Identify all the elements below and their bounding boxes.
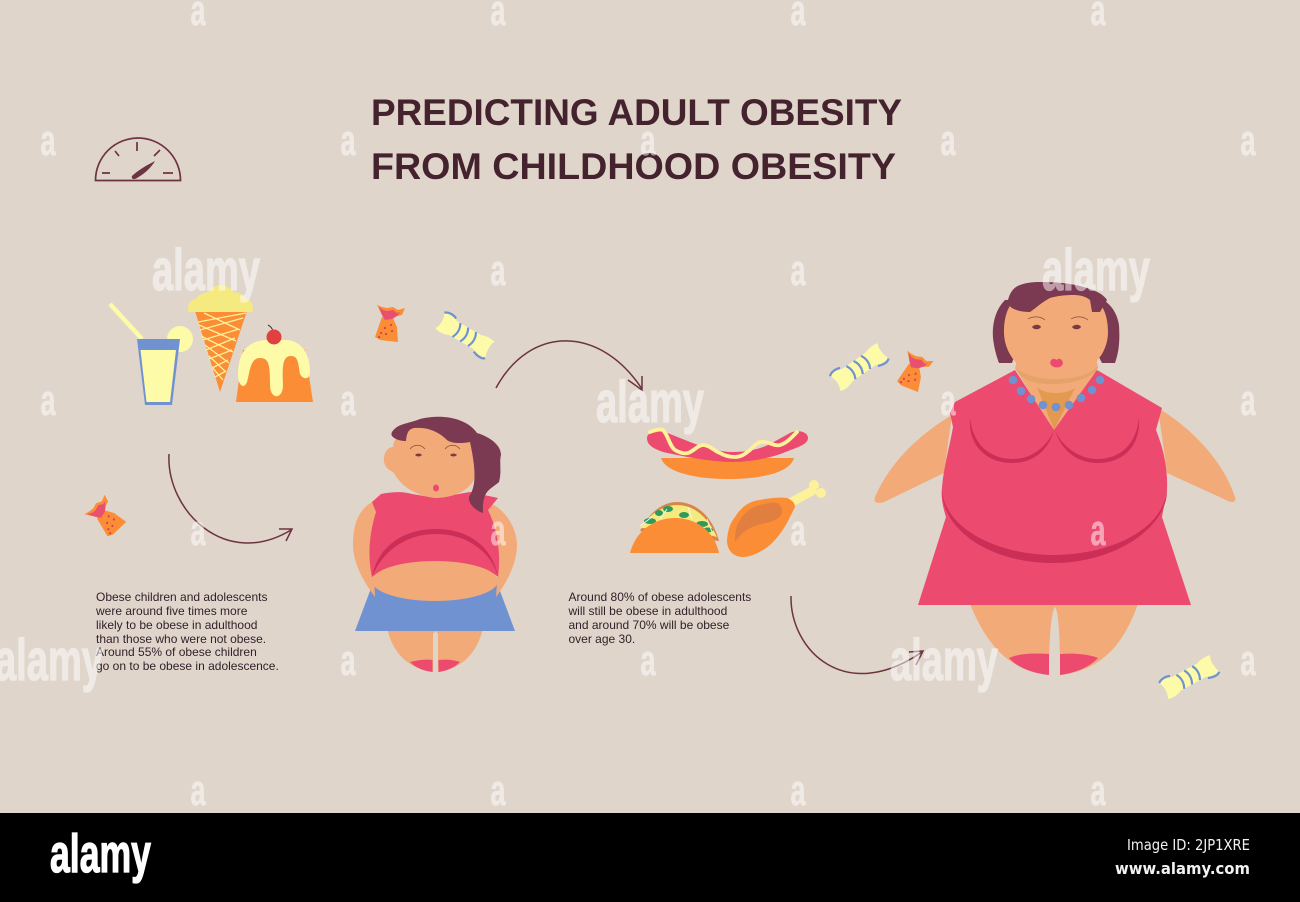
- footer logo: alamy: [50, 824, 151, 884]
- arrow: from sweets to girl: [169, 454, 292, 543]
- text block: children statistics: go on to be obese in adolescence.: [96, 659, 279, 673]
- watermark: small letter grid: a: [790, 246, 806, 295]
- text block: children statistics: than those who were not obese.: [96, 632, 266, 646]
- icon: hot dog: [647, 430, 808, 479]
- woman belly crease: [942, 490, 1167, 563]
- girl shirt: [369, 492, 499, 577]
- icon: pudding with cherry: [236, 325, 313, 402]
- woman hair back: [993, 298, 1119, 363]
- text block: adolescents statistics: will still be obese in adulthood: [568, 604, 727, 618]
- figure: obese girl: [353, 417, 517, 672]
- text block: adolescents statistics: and around 70% will be obese: [568, 618, 730, 632]
- watermark: small letter grid: a: [40, 376, 56, 425]
- woman neck and chest: [1015, 350, 1098, 432]
- watermark: small letter grid: a: [640, 636, 656, 685]
- woman dress: [918, 370, 1191, 605]
- watermark: small letter grid: a: [640, 116, 656, 165]
- text block: children statistics: likely to be obese in adulthood: [96, 618, 257, 632]
- girl legs: [387, 628, 483, 672]
- arrow: from girl to fast food: [496, 341, 642, 390]
- icon: taco: [630, 502, 719, 553]
- girl belly: [372, 561, 498, 601]
- girl face details: [410, 445, 460, 492]
- watermark: alamy repeated text: alamy: [596, 370, 704, 435]
- girl skirt: [355, 583, 515, 631]
- title: [371, 92, 902, 187]
- girl hair: [391, 417, 501, 513]
- text block: children statistics: were around five times more: [95, 604, 248, 618]
- watermark: small letter grid: a: [340, 116, 356, 165]
- text block: children statistics: Obese children and adolescents: [96, 590, 267, 604]
- icon: striped candy: [434, 311, 496, 360]
- watermark: small letter grid: a: [790, 506, 806, 555]
- icon: wrapped candy near woman: [896, 350, 934, 394]
- watermark: small letter grid: a: [340, 636, 356, 685]
- watermark: small letter grid: a: [790, 766, 806, 815]
- girl socks: [410, 660, 460, 672]
- icon: wrapped candy orange: [375, 305, 405, 342]
- icon: striped candy lower right: [1158, 653, 1220, 701]
- icon: chicken drumstick: [727, 480, 826, 557]
- girl head: [384, 426, 478, 498]
- icon: striped candy near woman: [829, 341, 890, 393]
- figure: obese adult woman: [875, 282, 1235, 675]
- woman necklace: [1009, 376, 1104, 411]
- girl arms: [353, 500, 517, 597]
- woman chest creases: [970, 418, 1139, 463]
- watermark: small letter grid: a: [340, 376, 356, 425]
- icon: drink glass with straw and lemon: [110, 304, 193, 405]
- woman arms: [875, 408, 1235, 503]
- watermark: small letter grid: a: [1090, 506, 1106, 555]
- watermark: small letter grid: a: [1240, 116, 1256, 165]
- text block: adolescents statistics: [568, 590, 751, 646]
- watermark: small letter grid: a: [1240, 376, 1256, 425]
- woman face details: [1028, 317, 1088, 368]
- watermark: small letter grid: a: [940, 116, 956, 165]
- watermark: small letter grid: a: [940, 376, 956, 425]
- text block: children statistics: Around 55% of obese children: [96, 645, 257, 659]
- footer image id: Image ID: 2JP1XRE: [1127, 836, 1250, 854]
- woman head: [1004, 294, 1108, 378]
- title: PREDICTING ADULT OBESITY: [371, 92, 902, 133]
- watermark: alamy repeated text: [0, 238, 1150, 693]
- icon: ice cream cone: [188, 285, 253, 392]
- woman socks: [1009, 653, 1098, 675]
- woman hair top: [1008, 282, 1107, 312]
- watermark: small letter grid: a: [190, 506, 206, 555]
- text block: adolescents statistics: over age 30.: [568, 632, 635, 646]
- footer bar: [0, 813, 1300, 902]
- icon: wrapped candy left: [83, 493, 131, 540]
- watermark: alamy repeated text: alamy: [890, 628, 998, 693]
- watermark: alamy repeated text: alamy: [1042, 238, 1150, 303]
- icon: speedometer gauge: [96, 138, 180, 180]
- watermark: alamy repeated text: alamy: [152, 238, 260, 303]
- text block: adolescents statistics: Around 80% of obese adolescents: [568, 590, 751, 604]
- watermark: small letter grid: a: [40, 116, 56, 165]
- woman legs: [970, 604, 1138, 675]
- watermark: small letter grid: a: [190, 766, 206, 815]
- title: FROM CHILDHOOD OBESITY: [371, 146, 896, 187]
- arrow: from fast food to woman: [791, 596, 923, 674]
- text block: children statistics: [95, 590, 279, 673]
- footer url: www.alamy.com: [1115, 859, 1250, 878]
- watermark: small letter grid: a: [1090, 766, 1106, 815]
- watermark: small letter grid: a: [490, 506, 506, 555]
- watermark: small letter grid: a: [1240, 636, 1256, 685]
- watermark: small letter grid: a: [490, 766, 506, 815]
- girl shirt crease: [372, 529, 498, 577]
- watermark: small letter grid: a: [490, 246, 506, 295]
